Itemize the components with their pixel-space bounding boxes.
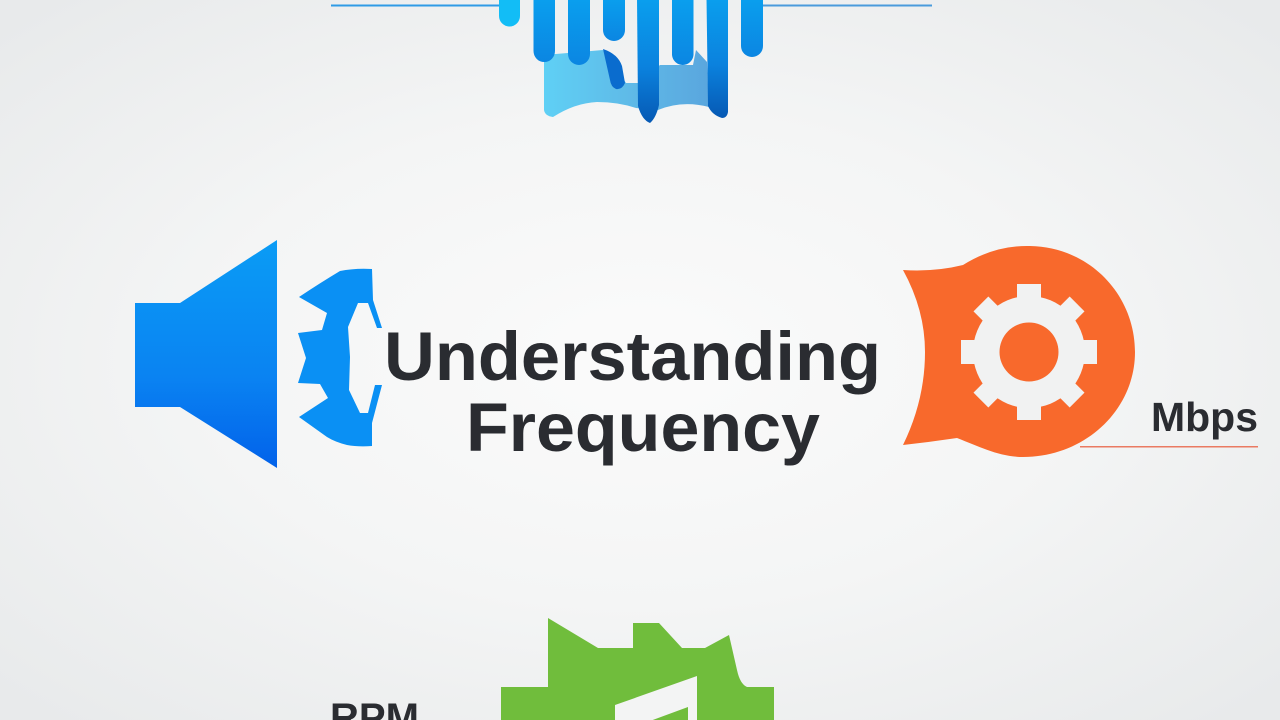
open book shape [544, 50, 709, 117]
gear cog [961, 284, 1097, 420]
speaker cone [135, 240, 277, 468]
Mbps underline [1080, 446, 1258, 448]
wave bar 3 [568, 0, 590, 65]
title line 1: Understanding [384, 318, 881, 395]
left signal line [331, 4, 501, 6]
orange badge shape [903, 246, 1135, 457]
wave bar 6 [672, 0, 694, 65]
wave bar 1 [499, 0, 520, 26]
wave bar 5 [637, 0, 659, 123]
icon: green gear with music note [501, 618, 774, 720]
wave bar 4 [603, 0, 625, 41]
wave bar 7 [706, 0, 728, 118]
wave bar 8 [741, 0, 763, 57]
icon: orange gear badge [903, 246, 1135, 457]
icon: sound wave over open book [331, 0, 932, 123]
right signal line [762, 4, 932, 6]
icon: speaker with gear waves [135, 240, 382, 468]
green gear [501, 618, 774, 720]
title [384, 318, 881, 466]
dark book fold [603, 49, 625, 89]
title line 2: Frequency [466, 389, 820, 466]
gear-shaped sound wave [298, 269, 382, 446]
wave bar 2 [534, 0, 555, 62]
Mbps text: Mbps [1151, 394, 1258, 440]
gear hole [1000, 322, 1058, 382]
music note [615, 676, 697, 720]
